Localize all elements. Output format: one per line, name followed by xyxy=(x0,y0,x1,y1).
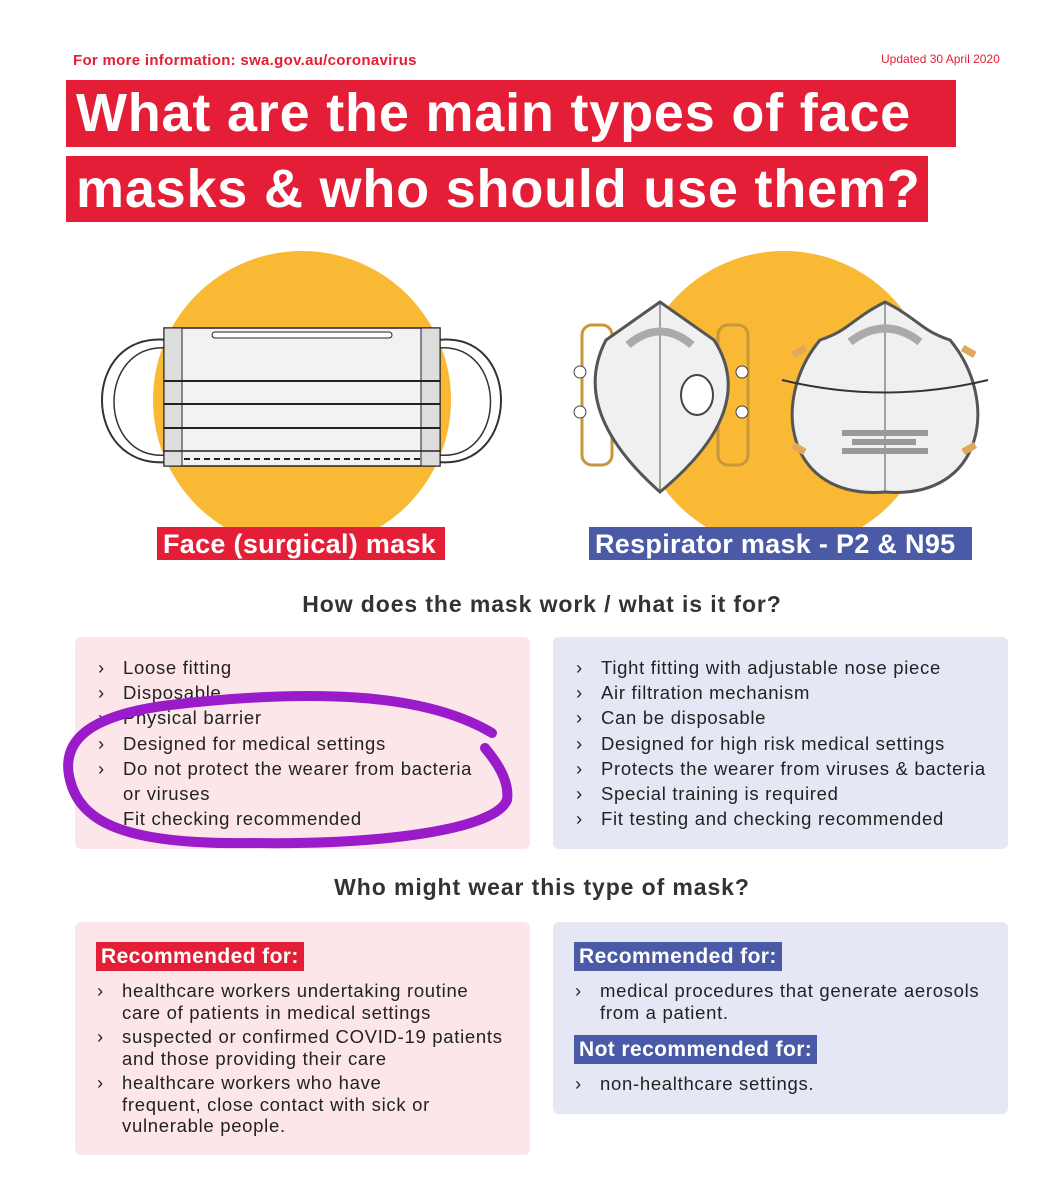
title: masks & who should use them? xyxy=(76,159,921,219)
label: face mask: Face (surgical) mask xyxy=(163,529,436,559)
heading: how does the mask work: How does the mask work / what is it for? xyxy=(302,591,782,617)
panel: face mask recommended: Recommended for: xyxy=(101,945,299,968)
title xyxy=(66,80,956,222)
panel: respirator features: Can be disposable xyxy=(601,707,766,728)
panel: face mask recommended: care of patients in medical settings xyxy=(122,1002,431,1022)
panel: face mask features: Do not protect the wearer from bacteria xyxy=(123,758,472,779)
panel: respirator recommended: from a patient. xyxy=(600,1002,729,1022)
panel: face mask recommended: vulnerable people. xyxy=(122,1115,286,1136)
panel: respirator features: Designed for high risk medical settings xyxy=(601,733,945,754)
panel: respirator features: Special training is required xyxy=(601,783,839,804)
panel: face mask features: Fit checking recommended xyxy=(123,808,362,829)
panel: face mask recommended: and those providing their care xyxy=(122,1048,387,1068)
panel: respirator features xyxy=(553,637,1008,849)
label: respirator mask: Respirator mask - P2 & N95 xyxy=(595,529,955,559)
panel: face mask recommended: healthcare workers who have xyxy=(122,1072,382,1093)
panel: face mask features: or viruses xyxy=(123,783,210,804)
panel: respirator recommended: Not recommended for: xyxy=(579,1038,812,1061)
panel: face mask features: Loose fitting xyxy=(123,657,232,678)
panel: respirator recommended: Recommended for: xyxy=(579,945,777,968)
panel: respirator features: Fit testing and checking recommended xyxy=(601,808,944,829)
panel: face mask features xyxy=(75,637,530,849)
illustration: masks xyxy=(101,251,988,527)
panel: face mask recommended: suspected or confirmed COVID-19 patients xyxy=(122,1026,503,1047)
updated date: Updated 30 April 2020 xyxy=(881,52,1000,66)
heading: who might wear: Who might wear this type of mask? xyxy=(334,874,750,900)
panel: respirator features: Air filtration mechanism xyxy=(601,682,810,703)
panel: respirator features: Tight fitting with adjustable nose piece xyxy=(601,657,941,678)
icon: respirator masks xyxy=(574,251,988,549)
panel: respirator features: Protects the wearer from viruses & bacteria xyxy=(601,758,986,779)
panel: face mask features: Disposable xyxy=(123,682,222,703)
panel: respirator recommended: medical procedures that generate aerosols xyxy=(600,980,979,1001)
panel: face mask recommended: frequent, close contact with sick or xyxy=(122,1094,430,1114)
panel: face mask features: Designed for medical settings xyxy=(123,733,386,754)
panel: face mask recommended: healthcare workers undertaking routine xyxy=(122,980,468,1001)
title: What are the main types of face xyxy=(76,83,911,143)
icon: surgical mask xyxy=(102,251,501,549)
panel: respirator recommended xyxy=(553,922,1008,1114)
panel: respirator recommended: non-healthcare settings. xyxy=(600,1073,814,1094)
panel: face mask features: Physical barrier xyxy=(123,707,262,728)
header link: For more information: swa.gov.au/coronavirus xyxy=(73,52,417,69)
panel: face mask recommended xyxy=(75,922,530,1155)
